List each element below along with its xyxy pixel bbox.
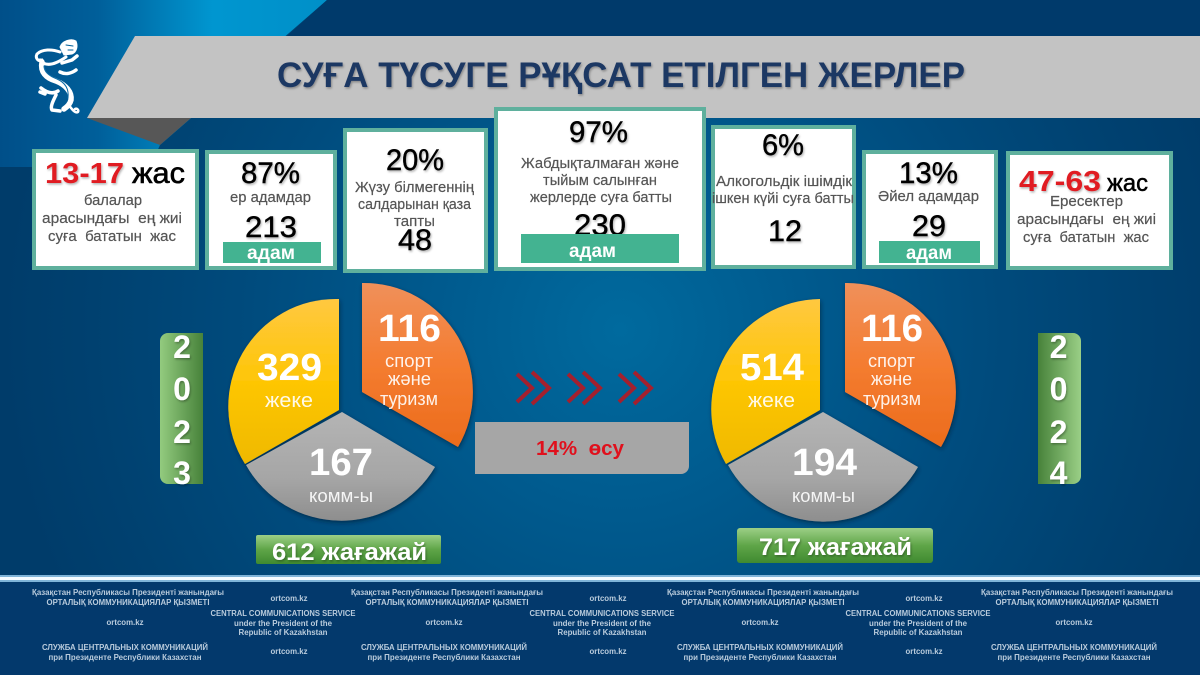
footer watermark text: Қазақстан Республикасы Президенті жанындағы: [981, 588, 1173, 597]
ribbon fold: [87, 118, 191, 145]
footer watermark text: СЛУЖБА ЦЕНТРАЛЬНЫХ КОММУНИКАЦИЙ: [42, 643, 208, 652]
description: балалар: [84, 192, 142, 209]
labels: жеке: [748, 390, 795, 412]
description: ішкен күйі суға батты: [712, 190, 854, 207]
footer watermark text: Republic of Kazakhstan: [558, 628, 647, 637]
description: [1017, 193, 1156, 246]
footer watermark text: CENTRAL COMMUNICATIONS SERVICE: [846, 609, 991, 618]
percent: 13%: [899, 157, 958, 190]
top right dark band: [287, 0, 1200, 36]
total 2023: 612 жағажай: [272, 539, 427, 566]
labels: комм-ы: [309, 486, 373, 506]
description: суға бататын жас: [1023, 229, 1149, 246]
card: 13-17 age: [34, 151, 197, 268]
year 2024: 2: [1050, 329, 1067, 365]
footer watermark text: ortcom.kz: [590, 594, 626, 603]
percent: 97%: [569, 116, 628, 149]
footer watermark text: Republic of Kazakhstan: [874, 628, 963, 637]
growth callout: 14% өсу: [536, 438, 625, 460]
labels: жеке: [265, 390, 313, 412]
total 2023: [256, 535, 441, 566]
description: [355, 179, 475, 230]
age unit: жас: [132, 157, 185, 190]
age range heading: 47-63: [1019, 166, 1101, 198]
card: 6% alcohol: [712, 127, 854, 267]
description: тыйым салынған: [543, 172, 657, 189]
card: 87% men: [207, 152, 335, 268]
labels: туризм: [863, 389, 921, 409]
percent: 20%: [386, 144, 444, 177]
footer watermark text: [32, 588, 1173, 662]
footer watermark text: ОРТАЛЫҚ КОММУНИКАЦИЯЛАР ҚЫЗМЕТІ: [46, 598, 210, 607]
pie chart 2024: [711, 283, 956, 522]
year 2023: 0: [173, 371, 191, 407]
description: салдарынан қаза: [358, 196, 472, 213]
percent: 6%: [762, 129, 804, 162]
description: Жабдықталмаған және: [521, 155, 679, 172]
unit bar: [223, 242, 321, 263]
footer watermark text: under the President of the: [553, 619, 652, 628]
total 2024: 717 жағажай: [759, 534, 912, 561]
card: 47-63 age: [1008, 153, 1171, 268]
description: Алкогольдік ішімдік: [716, 173, 852, 190]
title ribbon: [87, 36, 1200, 145]
footer watermark text: СЛУЖБА ЦЕНТРАЛЬНЫХ КОММУНИКАЦИЙ: [991, 643, 1157, 652]
labels: және: [871, 369, 912, 389]
footer watermark text: СЛУЖБА ЦЕНТРАЛЬНЫХ КОММУНИКАЦИЙ: [677, 643, 843, 652]
count: 213: [245, 211, 297, 244]
footer watermark text: Қазақстан Республикасы Президенті жанындағы: [351, 588, 543, 597]
labels: спорт: [385, 351, 433, 371]
unit: адам: [569, 241, 616, 262]
footer watermark text: ОРТАЛЫҚ КОММУНИКАЦИЯЛАР ҚЫЗМЕТІ: [682, 598, 844, 607]
footer band: [0, 575, 1200, 675]
arrows: growth direction: [517, 372, 651, 404]
top-left accent shape: [0, 0, 327, 167]
footer watermark text: under the President of the: [234, 619, 333, 628]
footer watermark text: ortcom.kz: [906, 594, 942, 603]
footer watermark text: ОРТАЛЫҚ КОММУНИКАЦИЯЛАР ҚЫЗМЕТІ: [996, 598, 1158, 607]
age range heading: 13-17: [45, 158, 124, 190]
year 2023: 3: [173, 455, 191, 491]
labels: туризм: [380, 389, 438, 409]
year 2024: 2: [1050, 414, 1067, 450]
count: 12: [768, 215, 802, 248]
year 2024: [1038, 329, 1081, 491]
logo: snow leopard: [36, 40, 78, 112]
slice: sport and tourism: [845, 283, 956, 447]
footer watermark text: CENTRAL COMMUNICATIONS SERVICE: [530, 609, 675, 618]
card: 97% prohibited places: [496, 109, 704, 269]
total 2024: [737, 528, 933, 563]
title: СУҒА ТҮСУГЕ РҰҚСАТ ЕТІЛГЕН ЖЕРЛЕР: [277, 56, 965, 95]
slice: sport and tourism: [362, 283, 473, 447]
description: арасындағы ең жиі: [1017, 211, 1156, 228]
footer watermark text: ortcom.kz: [906, 647, 942, 656]
year 2023: [160, 329, 203, 491]
slice: individual: [711, 299, 820, 464]
footer watermark text: СЛУЖБА ЦЕНТРАЛЬНЫХ КОММУНИКАЦИЙ: [361, 643, 527, 652]
age unit: жас: [1107, 170, 1148, 197]
count: 29: [912, 210, 946, 243]
slice: individual: [228, 299, 339, 464]
description: [42, 192, 182, 245]
labels: [740, 308, 923, 506]
labels: комм-ы: [792, 486, 855, 506]
description: Әйел адамдар: [878, 188, 979, 205]
footer watermark text: при Президенте Республики Казахстан: [48, 653, 202, 662]
footer watermark text: ortcom.kz: [1056, 618, 1092, 627]
percent: 87%: [241, 157, 300, 190]
labels: 514: [740, 347, 804, 389]
footer watermark text: при Президенте Республики Казахстан: [684, 653, 837, 662]
description: Жүзу білмегеннің: [355, 179, 475, 196]
footer watermark text: Қазақстан Республикасы Президенті жанындағы: [32, 588, 224, 597]
card: 13% women: [864, 152, 996, 267]
year 2023: 2: [173, 414, 191, 450]
description: тапты: [394, 213, 435, 230]
year 2024: 0: [1050, 371, 1067, 407]
unit: адам: [906, 243, 952, 264]
labels: 116: [861, 308, 923, 350]
footer watermark text: ortcom.kz: [270, 594, 308, 603]
card: 20% cannot swim: [345, 130, 486, 271]
labels: спорт: [868, 351, 915, 371]
unit bar: [521, 234, 679, 263]
labels: [257, 308, 441, 506]
footer watermark text: при Президенте Республики Казахстан: [368, 653, 521, 662]
labels: және: [388, 369, 431, 389]
description: ер адамдар: [230, 189, 311, 206]
year 2024: 4: [1050, 455, 1068, 491]
footer watermark text: при Президенте Республики Казахстан: [998, 653, 1151, 662]
labels: 329: [257, 347, 322, 389]
ribbon: [87, 36, 1200, 118]
growth callout: [475, 422, 689, 474]
footer watermark text: Қазақстан Республикасы Президенті жанындағы: [667, 588, 859, 597]
footer watermark text: under the President of the: [869, 619, 968, 628]
slice: communal: [246, 412, 435, 521]
description: [521, 155, 679, 206]
labels: 167: [309, 442, 373, 484]
description: [712, 173, 854, 207]
description: жерлерде суға батты: [530, 189, 672, 206]
pie chart 2023: [228, 283, 473, 521]
unit bar: [879, 241, 980, 263]
footer watermark text: ortcom.kz: [106, 618, 144, 627]
count: 230: [574, 209, 626, 242]
footer watermark text: ortcom.kz: [742, 618, 778, 627]
labels: 116: [378, 308, 441, 350]
unit: адам: [247, 243, 295, 264]
year 2023: 2: [173, 329, 191, 365]
description: Ересектер: [1050, 193, 1123, 210]
footer watermark text: ortcom.kz: [590, 647, 626, 656]
labels: 194: [792, 442, 857, 484]
footer watermark text: ortcom.kz: [270, 647, 308, 656]
count: 48: [398, 224, 432, 257]
slice: communal: [728, 412, 918, 522]
footer watermark text: Republic of Kazakhstan: [238, 628, 328, 637]
footer watermark text: ortcom.kz: [426, 618, 462, 627]
footer watermark text: ОРТАЛЫҚ КОММУНИКАЦИЯЛАР ҚЫЗМЕТІ: [366, 598, 528, 607]
description: арасындағы ең жиі: [42, 210, 182, 227]
footer watermark text: CENTRAL COMMUNICATIONS SERVICE: [210, 609, 356, 618]
description: суға бататын жас: [48, 228, 176, 245]
